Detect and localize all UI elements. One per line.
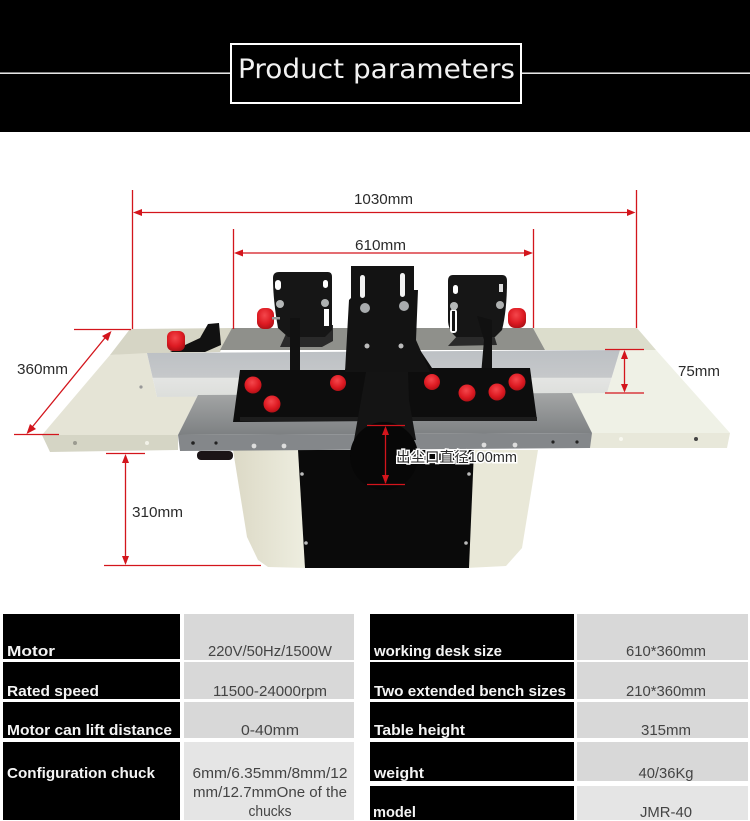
dimension: dust port 100mm	[367, 426, 517, 484]
row: configuration chuck: chucks	[248, 803, 292, 820]
row: motor lift distance: 0-40mm	[241, 722, 299, 739]
row: weight	[370, 742, 748, 782]
row: extended bench sizes: Two extended bench sizes	[374, 683, 566, 700]
steel table front	[178, 393, 592, 451]
row: configuration chuck	[3, 742, 354, 820]
table: right specifications	[370, 614, 748, 821]
row: rated speed: 11500-24000rpm	[213, 683, 327, 700]
aluminium fence	[147, 350, 620, 397]
row: rated speed	[3, 662, 354, 700]
row: working desk size	[370, 614, 748, 660]
table: left specifications	[3, 614, 354, 820]
row: model: model	[373, 804, 416, 821]
row: model: JMR-40	[640, 804, 692, 821]
row: working desk size: working desk size	[373, 643, 502, 660]
black accessory plate with knobs	[233, 350, 537, 422]
dust port	[350, 372, 418, 490]
dimension: depth 360mm	[14, 330, 131, 434]
dimension: depth 360mm: 360mm	[17, 361, 68, 378]
row: working desk size: 610*360mm	[626, 643, 706, 660]
row: motor: Motor	[7, 643, 55, 660]
centre fence bracket	[345, 266, 430, 372]
row: configuration chuck: Configuration chuck	[7, 765, 156, 782]
dimension: height 310mm	[104, 454, 261, 566]
row: table height	[370, 702, 748, 739]
dimension: overall width 1030mm	[132, 190, 636, 329]
dimension: dust port 100mm: 出尘口直径100mm	[396, 449, 517, 466]
row: motor	[3, 614, 354, 660]
row: model	[370, 786, 748, 821]
dimension: fence height 75mm	[605, 350, 720, 393]
row: configuration chuck: 6mm/6.35mm/8mm/12	[192, 765, 348, 782]
row: extended bench sizes	[370, 662, 748, 700]
dimension: overall width 1030mm: 1030mm	[354, 191, 413, 208]
cabinet base	[197, 450, 538, 568]
row: configuration chuck: mm/12.7mmOne of the	[193, 784, 347, 801]
dimension: working width 610mm	[234, 229, 534, 329]
product illustration: router table	[42, 266, 730, 568]
row: weight: 40/36Kg	[638, 765, 694, 782]
title	[231, 44, 521, 103]
row: table height: Table height	[374, 722, 465, 739]
row: motor lift distance	[3, 702, 354, 739]
row: motor lift distance: Motor can lift distance	[7, 722, 172, 739]
left feather board	[257, 272, 333, 376]
title: Product parameters	[238, 54, 515, 85]
right feather board	[448, 275, 526, 375]
dimension: height 310mm: 310mm	[132, 504, 183, 521]
left hold-down switch	[167, 323, 221, 352]
row: extended bench sizes: 210*360mm	[626, 683, 706, 700]
header band	[0, 0, 750, 132]
steel table top	[220, 328, 545, 350]
dimension: fence height 75mm: 75mm	[678, 363, 720, 380]
left extension table	[42, 328, 232, 452]
row: motor: 220V/50Hz/1500W	[208, 643, 333, 660]
right extension table	[533, 328, 730, 448]
dimension: working width 610mm: 610mm	[355, 237, 406, 254]
row: rated speed: Rated speed	[7, 683, 99, 700]
row: weight: weight	[373, 765, 424, 782]
row: table height: 315mm	[641, 722, 691, 739]
